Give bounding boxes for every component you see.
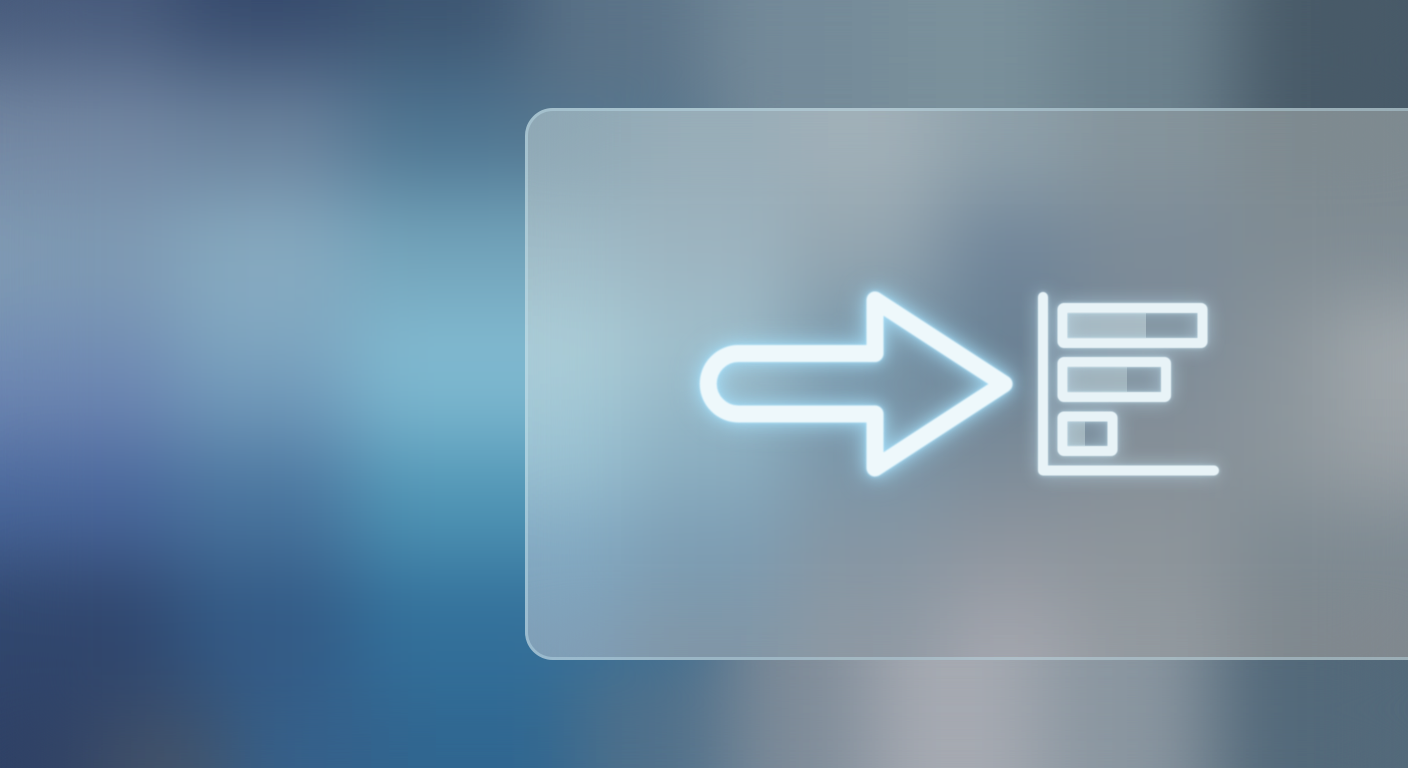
panel: frosted glass card (525, 108, 1408, 660)
chart axes and bar outlines (1043, 297, 1214, 470)
icon: glowing outline arrow (708, 300, 1004, 468)
bar chart icon (1043, 297, 1214, 470)
bar fills (1068, 313, 1198, 446)
